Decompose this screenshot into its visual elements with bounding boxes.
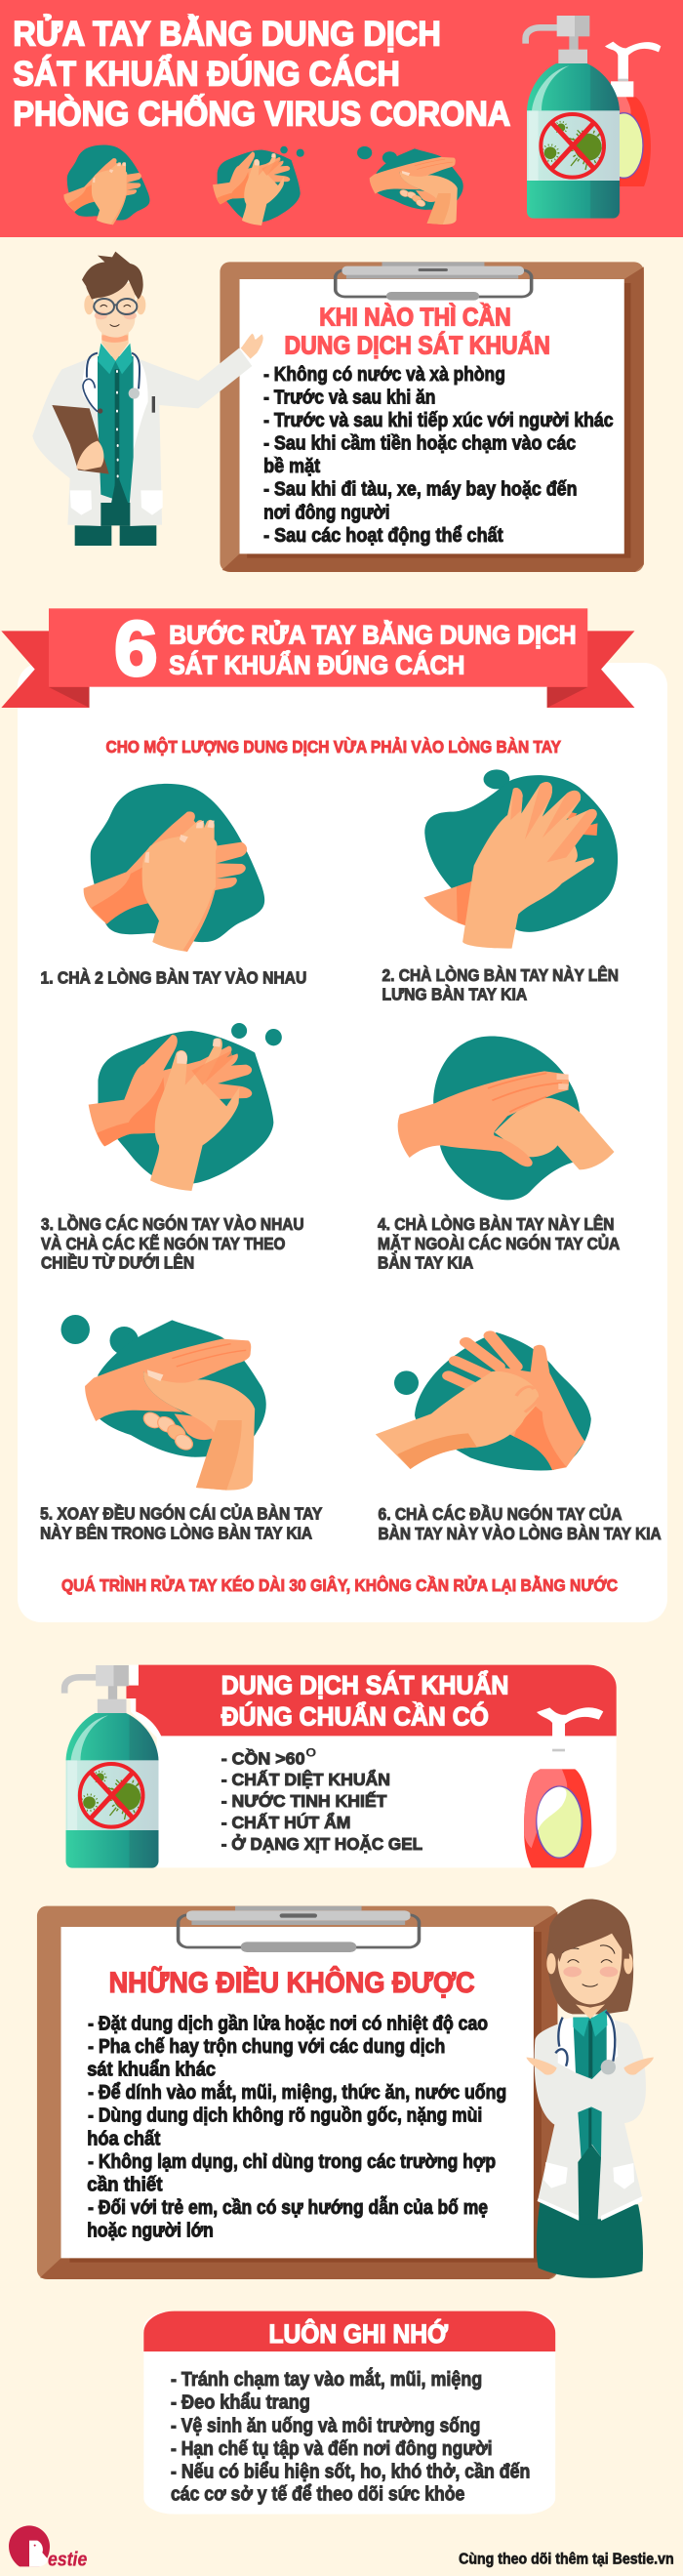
- clipboard list: sát khuẩn khác: [87, 2060, 216, 2081]
- clipboard heading: NHỮNG ĐIỀU KHÔNG ĐƯỢC: [109, 1966, 475, 1999]
- reminder list: [171, 2367, 530, 2506]
- ingredient list: [221, 1746, 422, 1854]
- icon: green sanitizer bottle: [64, 1665, 158, 1868]
- step 3 and 4 captions: CHIỀU TỪ DƯỚI LÊN: [41, 1253, 194, 1273]
- panel: things not to do clipboard: [37, 1906, 557, 2279]
- clipboard list: - Dùng dung dịch không rõ nguồn gốc, nặng mùi: [88, 2106, 482, 2127]
- step 5 and 6 captions: [40, 1503, 662, 1543]
- icon: interlaced fingers: [213, 146, 304, 225]
- card background: [143, 2311, 555, 2515]
- clipboard list: - Đối với trẻ em, cần có sự hướng dẫn của bố mẹ: [88, 2195, 488, 2219]
- clipboard list: nơi đông người: [263, 503, 390, 524]
- icon: step 3 hands: [89, 1023, 282, 1191]
- ribbon heading: SÁT KHUẨN ĐÚNG CÁCH: [169, 650, 464, 680]
- reminder list: các cơ sở y tế để theo dõi sức khỏe: [171, 2484, 464, 2506]
- panel: standard sanitizer: [126, 1665, 617, 1867]
- clipboard list: - Không có nước và xà phòng: [263, 364, 505, 386]
- step 1 and 2 captions: LƯNG BÀN TAY KIA: [382, 985, 527, 1004]
- steps row 2: [41, 1023, 620, 1273]
- clip: [179, 1906, 419, 1952]
- step 1 and 2 captions: [41, 965, 619, 1004]
- card heading band: [143, 2311, 555, 2351]
- clipboard board: [220, 262, 644, 572]
- panel: when to use sanitizer clipboard: [220, 262, 644, 572]
- nurse illustration: [526, 1900, 654, 2278]
- step 5 and 6 captions: NÀY BÊN TRONG LÒNG BÀN TAY KIA: [40, 1523, 312, 1543]
- step 3 and 4 captions: 3. LỒNG CÁC NGÓN TAY VÀO NHAU: [41, 1214, 304, 1234]
- reminder list: - Hạn chế tụ tập và đến nơi đông người: [171, 2438, 492, 2460]
- steps row 3: [40, 1315, 662, 1595]
- ingredient list: - NƯỚC TINH KHIẾT: [221, 1791, 387, 1811]
- step 1 and 2 captions: 1. CHÀ 2 LÒNG BÀN TAY VÀO NHAU: [41, 967, 306, 988]
- logo: Bestie: [9, 2525, 87, 2570]
- clipboard list: hoặc người lớn: [87, 2221, 214, 2242]
- panel: always remember: [143, 2311, 674, 2567]
- reminder list: - Đeo khẩu trang: [171, 2392, 310, 2414]
- icon: step 1 hands: [84, 784, 264, 952]
- title: RỬA TAY BẰNG DUNG DỊCH: [13, 15, 441, 53]
- title: [13, 15, 510, 133]
- step 3 and 4 captions: BÀN TAY KIA: [378, 1253, 473, 1273]
- clipboard list: [263, 364, 614, 547]
- clipboard list: [87, 2013, 506, 2242]
- icon: step 6 hands: [376, 1332, 591, 1470]
- clipboard list: cần thiết: [87, 2174, 163, 2195]
- title: SÁT KHUẨN ĐÚNG CÁCH: [13, 55, 400, 93]
- ribbon heading: 6: [114, 605, 158, 692]
- card background: [126, 1665, 617, 1867]
- icon: step 5 hands: [61, 1315, 266, 1491]
- card heading: LUÔN GHI NHỚ: [268, 2318, 449, 2349]
- clipboard heading: [285, 303, 550, 359]
- ingredient list: - CHẤT DIỆT KHUẨN: [221, 1770, 390, 1789]
- icon: red gel bottle: [524, 1707, 603, 1867]
- clip: [336, 262, 532, 301]
- step 3 and 4 captions: VÀ CHÀ CÁC KẼ NGÓN TAY THEO: [41, 1234, 285, 1253]
- ingredient list: - CỒN >60: [221, 1748, 305, 1769]
- header banner: [0, 0, 683, 237]
- ingredient list: - Ở DẠNG XỊT HOẶC GEL: [221, 1834, 422, 1854]
- clipboard list: - Pha chế hay trộn chung với các dung dịch: [88, 2036, 445, 2058]
- clipboard heading: DUNG DỊCH SÁT KHUẨN: [285, 331, 550, 359]
- ingredient list: O: [305, 1746, 316, 1760]
- clipboard list: - Sau các hoạt động thể chất: [263, 525, 503, 547]
- icon: sanitizer bottles: [526, 16, 661, 219]
- icon: rubbing palms: [63, 145, 149, 225]
- reminder list: - Tránh chạm tay vào mắt, mũi, miệng: [171, 2367, 482, 2391]
- doctor illustration: [32, 252, 263, 546]
- card heading: DUNG DỊCH SÁT KHUẨN: [221, 1670, 508, 1700]
- clipboard list: - Đặt dung dịch gần lửa hoặc nơi có nhiệt độ cao: [88, 2013, 488, 2034]
- logo: Bestie: estie: [48, 2548, 87, 2570]
- clipboard list: hóa chất: [87, 2128, 160, 2149]
- step 3 and 4 captions: [41, 1214, 620, 1273]
- ribbon heading: [1, 605, 634, 708]
- card heading: ĐÚNG CHUẨN CẦN CÓ: [221, 1701, 489, 1732]
- steps row 1: [41, 736, 619, 1004]
- panel: six steps: [1, 605, 667, 1622]
- clipboard list: bề mặt: [263, 456, 320, 477]
- icon: thumb rub: [357, 146, 463, 225]
- ingredient list: - CHẤT HÚT ẨM: [221, 1813, 350, 1832]
- icon: step 4 hands: [398, 1037, 614, 1200]
- card heading: [221, 1670, 508, 1732]
- clipboard board: [37, 1906, 557, 2279]
- icon: step 2 hands: [423, 769, 618, 949]
- step 5 and 6 captions: 5. XOAY ĐỀU NGÓN CÁI CỦA BÀN TAY: [40, 1503, 323, 1524]
- clipboard list: - Trước và sau khi ăn: [263, 387, 435, 408]
- reminder list: - Vệ sinh ăn uống và môi trường sống: [171, 2415, 480, 2436]
- clipboard heading: KHI NÀO THÌ CẦN: [319, 303, 511, 331]
